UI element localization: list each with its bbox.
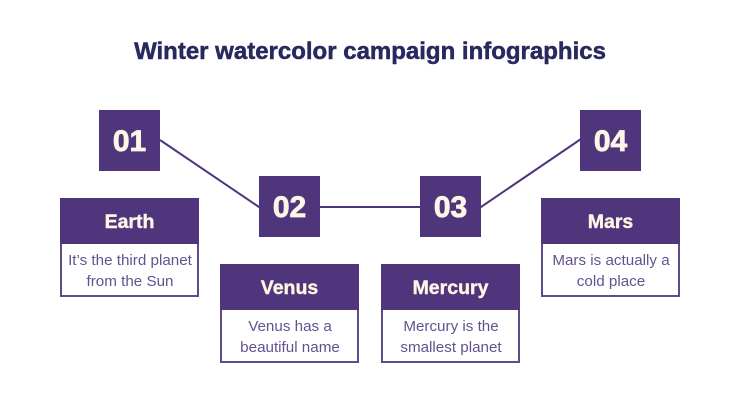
card: Mercury: smallest planet: [400, 338, 502, 356]
card: Earth: It’s the third planet: [68, 252, 192, 269]
number badge 01: [99, 110, 160, 171]
card: Mars: [541, 198, 680, 297]
card: Mercury: [381, 264, 520, 363]
card: Mars: Mars is actually a: [552, 252, 670, 269]
card: Mars: Mars: [588, 211, 633, 233]
card: Earth: from the Sun: [87, 272, 173, 290]
title: Winter watercolor campaign infographics: [134, 38, 606, 65]
number badge 04: 04: [594, 125, 627, 158]
number badge 02: 02: [273, 191, 306, 224]
number badge 01: 01: [113, 125, 146, 158]
card: Mars: cold place: [577, 272, 645, 290]
card: Earth: [60, 198, 199, 297]
card: Venus: beautiful name: [240, 338, 340, 356]
card: Earth: Earth: [105, 211, 154, 233]
card: Venus: Venus: [261, 277, 318, 299]
card: Mercury: Mercury: [413, 277, 488, 299]
number badge 02: [259, 176, 320, 237]
card: Venus: Venus has a: [248, 318, 332, 335]
card: Venus: [220, 264, 359, 363]
number badge 04: [580, 110, 641, 171]
number badge 03: [420, 176, 481, 237]
card: Mercury: Mercury is the: [403, 318, 499, 335]
number badge 03: 03: [434, 191, 467, 224]
